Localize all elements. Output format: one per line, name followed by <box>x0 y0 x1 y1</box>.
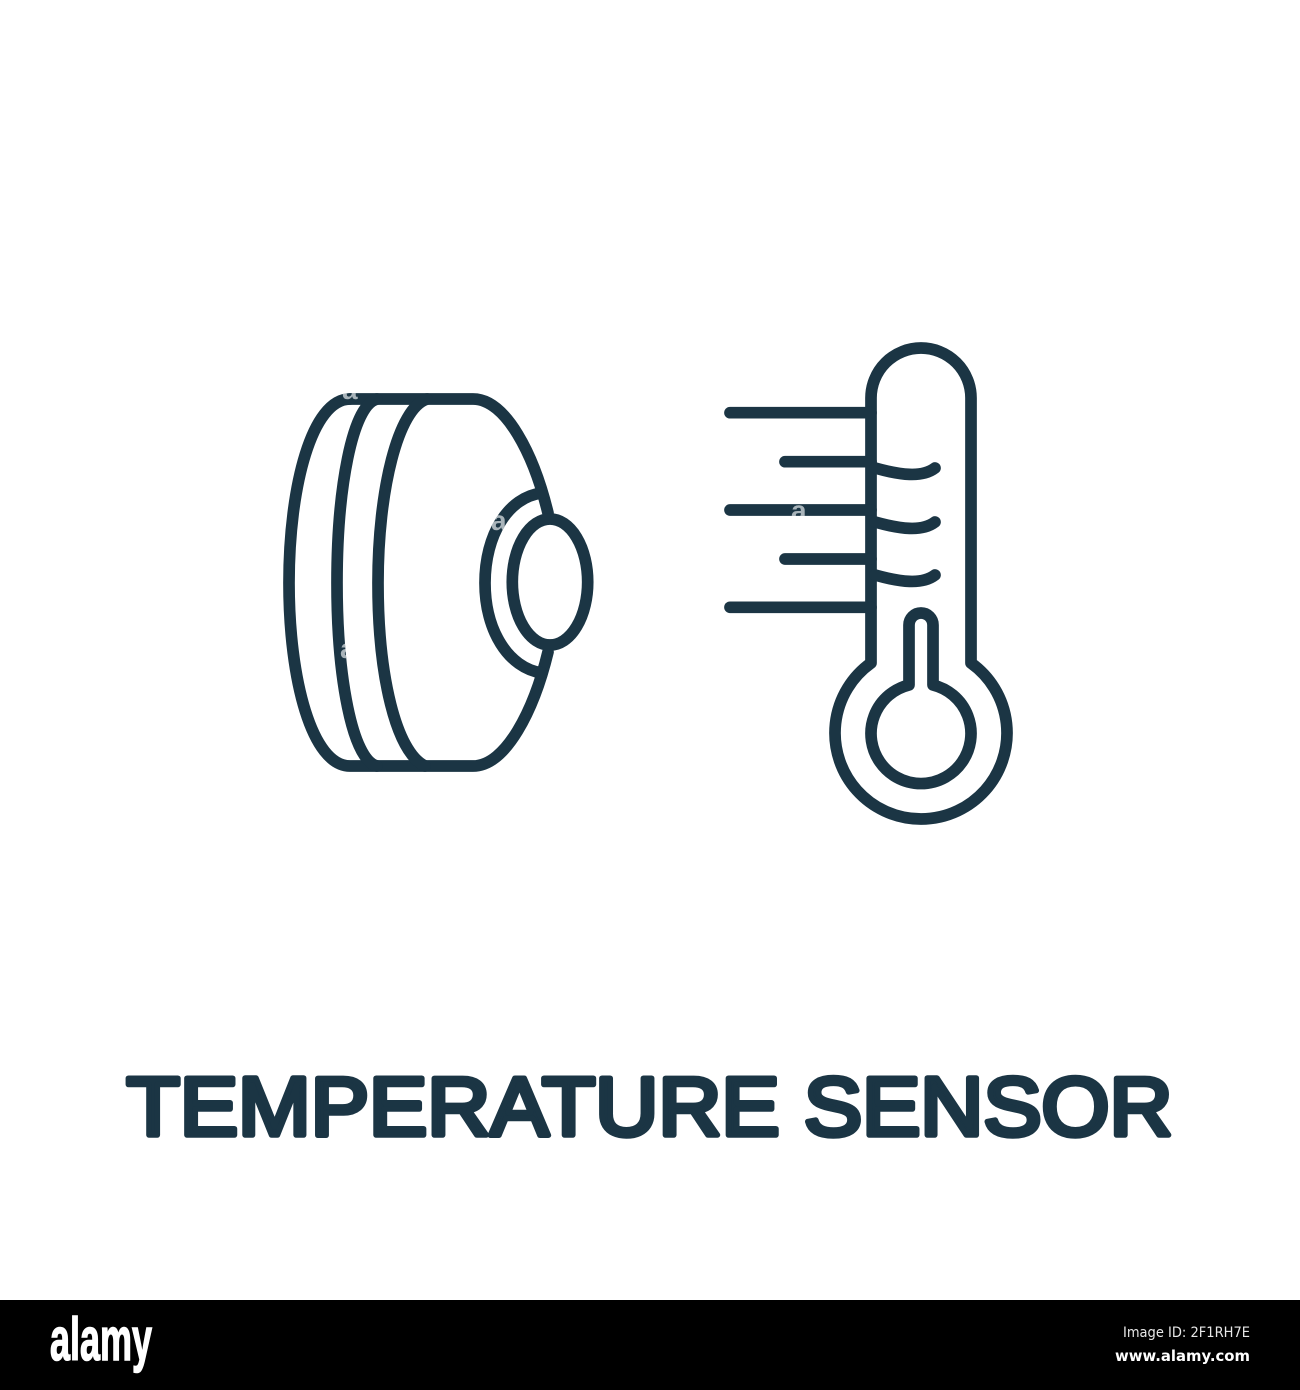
logo: alamy: alamy <box>50 1306 152 1373</box>
icon: thermometer with heat lines <box>730 348 1007 819</box>
image id: Image ID: 2F1RH7E <box>1123 1325 1250 1341</box>
website: www.alamy.com <box>1115 1347 1250 1365</box>
title: TEMPERATURE SENSOR <box>126 1060 1172 1153</box>
watermark marks on icon strokes: a <box>491 505 507 536</box>
footer bar <box>0 1300 1300 1390</box>
watermark marks on icon strokes: a <box>342 374 358 405</box>
icon: sensor puck <box>289 399 588 766</box>
watermark marks on icon strokes: a <box>791 495 807 526</box>
watermark marks on icon strokes: a <box>340 633 356 664</box>
watermark marks on icon strokes <box>340 374 807 664</box>
